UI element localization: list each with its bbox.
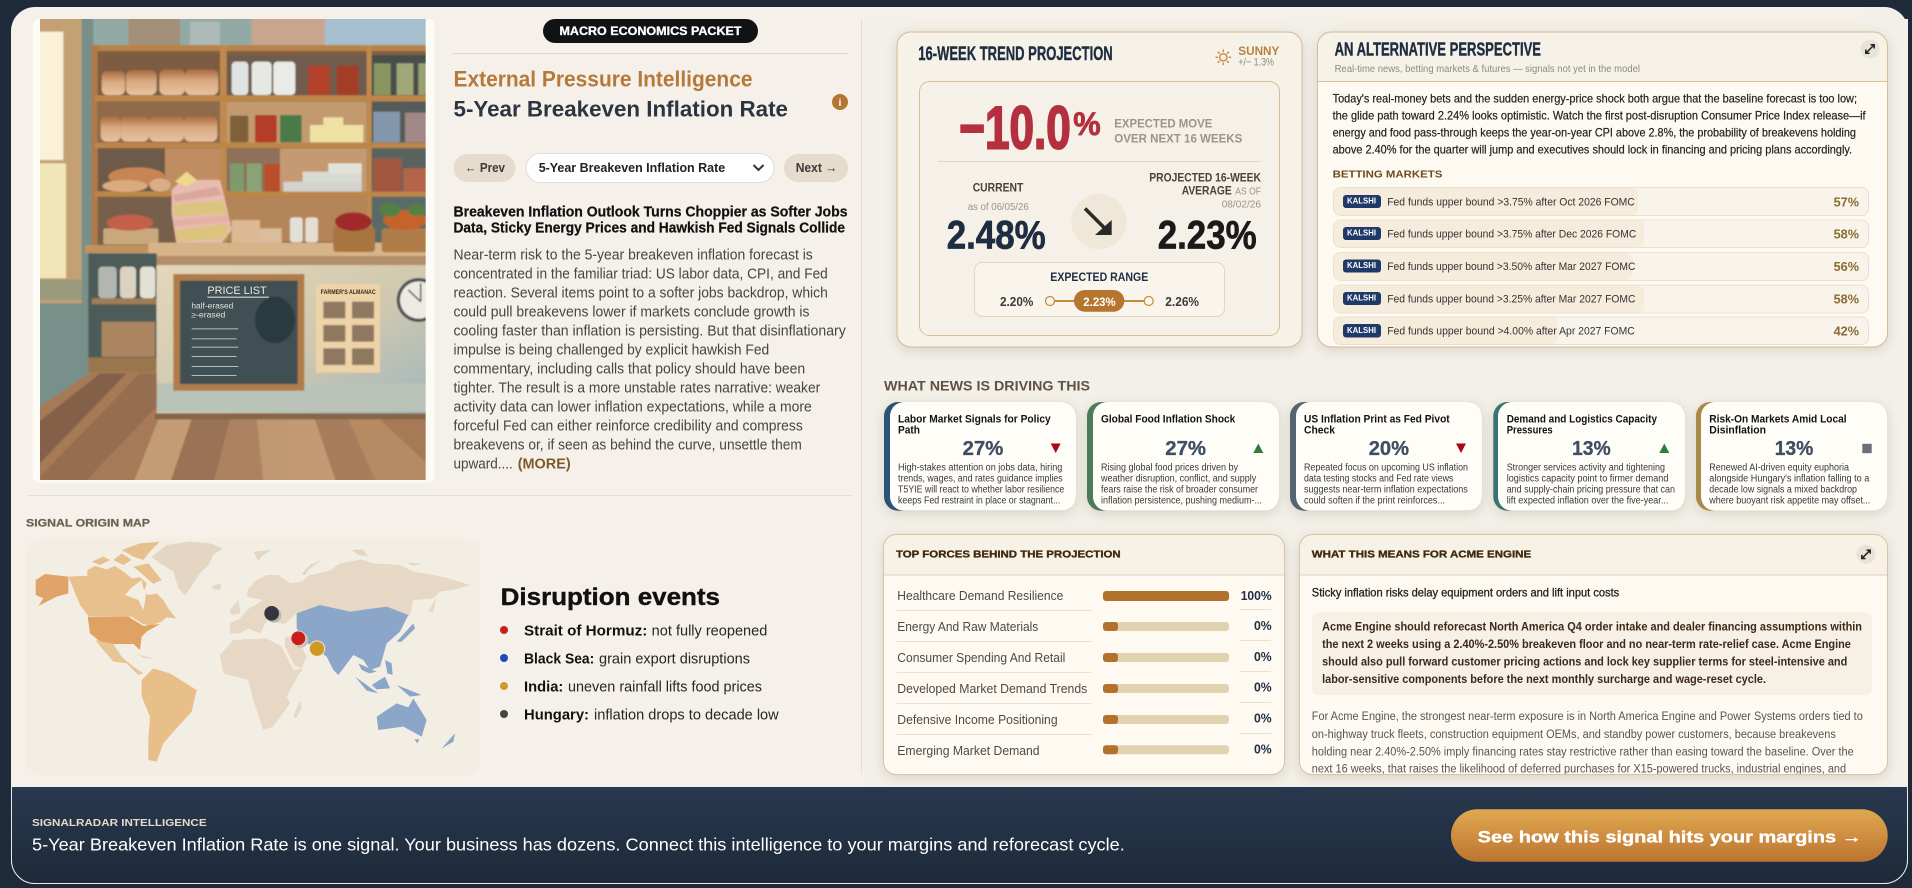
expected move caption: [1114, 116, 1242, 145]
floor: [37, 372, 430, 483]
event: Strait of Hormuz: not fully reopened: [652, 624, 767, 640]
summary text: concentrated in the familiar triad: US labor data, CPI, and Fed: [454, 266, 828, 282]
news card: risk-on markets: Disinflation: [1709, 424, 1766, 436]
panel: an alternative perspective: [1318, 32, 1888, 347]
betting market row 5: 42%: [1834, 324, 1859, 338]
vertical column divider: [861, 19, 862, 774]
weather label: +/− 1.3%: [1238, 57, 1274, 69]
current value: as of 06/05/26: [968, 201, 1029, 213]
news card: US inflation print: US Inflation Print as Fed Pivot: [1304, 413, 1450, 425]
news card: global food: weather disruption, conflict, and supply: [1100, 474, 1256, 485]
expected range: 2.26%: [1165, 295, 1199, 309]
headline: Breakeven Inflation Outlook Turns Choppier as Softer Jobs: [454, 204, 848, 220]
region: Alaska: [36, 574, 68, 606]
bread loaves: [102, 71, 125, 95]
force row: defensive income: [897, 712, 1272, 727]
event: India: uneven rainfall lifts food prices: [568, 680, 762, 696]
force row: defensive income: 0%: [1254, 712, 1272, 726]
expected move figure: %: [1073, 106, 1101, 142]
news card: demand and logistics: logistics capacity point to firmer demand: [1507, 474, 1668, 485]
footer eyebrow: SIGNALRADAR INTELLIGENCE: [32, 817, 207, 829]
betting market row 5: [1334, 317, 1868, 344]
forces title: TOP FORCES BEHIND THE PROJECTION: [896, 548, 1121, 560]
force row: healthcare: 100%: [1241, 589, 1272, 603]
summary text: impulse is being challenged by explicit hawkish Fed: [454, 342, 769, 358]
force row: energy: Energy And Raw Materials: [897, 619, 1039, 634]
event: Hungary: [500, 708, 779, 724]
page heading: External Pressure Intelligence: [454, 66, 752, 92]
betting market row 3: [1334, 252, 1868, 280]
force row: emerging markets: Emerging Market Demand: [897, 743, 1040, 758]
expected range: EXPECTED RANGE: [1050, 272, 1149, 284]
implication title: WHAT THIS MEANS FOR ACME ENGINE: [1312, 548, 1531, 560]
expected range: [974, 262, 1224, 316]
betting market row 2: 58%: [1834, 228, 1859, 242]
news card: risk-on markets: 13%: [1775, 438, 1814, 460]
projected value: PROJECTED 16-WEEK: [1149, 172, 1262, 184]
news card: labor market: Labor Market Signals for Policy: [898, 413, 1052, 425]
betting market row 5: KALSHI: [1347, 326, 1376, 335]
force row: developed markets: 0%: [1254, 681, 1272, 695]
news card: risk-on markets: [1696, 402, 1887, 511]
summary text: upward....: [454, 456, 513, 472]
region: United States: [88, 617, 160, 650]
betting market row 1: KALSHI: [1347, 197, 1376, 206]
implication details: holding near 2.40%-2.50% imply financing rates stay restrictive rather than easing toward the baseline. Over the: [1312, 747, 1854, 759]
footer banner: [12, 787, 1908, 884]
news card: global food: Global Food Inflation Shock: [1101, 413, 1236, 425]
chalkboard lettering: ≥-erased: [191, 310, 225, 319]
news card: demand and logistics: 13%: [1572, 438, 1611, 460]
chalkboard lettering: PRICE LIST: [207, 285, 267, 297]
news card: demand and logistics: [1493, 402, 1685, 511]
button: previous: ← Prev: [465, 160, 506, 175]
summary text: cooling faster than inflation is persisting. But that disinflationary: [454, 323, 847, 339]
betting market row 4: KALSHI: [1347, 294, 1376, 303]
arrow: downward trend: [1071, 194, 1127, 249]
projected value: AVERAGE: [1182, 185, 1232, 197]
betting market row 2: [1334, 220, 1868, 248]
news card: labor market: trends, wages, and rates guidance implies: [898, 474, 1063, 485]
stack of receipts: [172, 175, 232, 245]
footer message: 5-Year Breakeven Inflation Rate is one signal. Your business has dozens. Connect this intelligence to your margins and reforecast cycle.: [32, 834, 1125, 854]
alternative commentary: the glide path toward 2.24% looks optimistic. Watch the first post-disruption Consumer Price Index release—if: [1333, 109, 1866, 123]
force row: consumer: [897, 650, 1272, 665]
wall top: [92, 19, 252, 46]
summary text: forceful Fed can either reinforce credibility and compress: [454, 418, 803, 434]
alternative commentary: above 2.40% for the quarter will jump and executives should lock in financing and pricing plans accordingly.: [1333, 143, 1852, 157]
dropdown selector: 5-Year Breakeven Inflation Rate: [539, 161, 725, 175]
summary text: Near-term risk to the 5-year breakeven inflation forecast is: [454, 247, 813, 263]
summary text: breakevens or, if seen as behind the curve, unsettle them: [454, 437, 802, 453]
button: next: Next →: [796, 160, 837, 175]
projected value: 2.23%: [1158, 213, 1257, 257]
news card: global food: 27%: [1165, 438, 1206, 460]
news card: labor market: [884, 402, 1076, 511]
event: Hungary: inflation drops to decade low: [594, 708, 779, 724]
inner panel: [920, 82, 1280, 336]
betting market row 4: 58%: [1834, 292, 1859, 306]
news card: US inflation print: data testing stocks and Fed rate views: [1304, 474, 1453, 485]
panel: 16-week trend projection: [897, 32, 1302, 347]
news card: labor market: Path: [898, 424, 920, 436]
button: next: [784, 154, 848, 182]
expected range: 2.23%: [1083, 297, 1116, 309]
force row: developed markets: Developed Market Demand Trends: [897, 681, 1088, 696]
betting market row 3: 56%: [1834, 260, 1859, 274]
betting market row 2: KALSHI: [1347, 229, 1376, 238]
chalkboard lettering: [191, 285, 376, 376]
weather label: [1238, 44, 1279, 69]
weather label: SUNNY: [1238, 44, 1279, 58]
force row: energy: [897, 619, 1272, 634]
icon: sun: [1216, 50, 1231, 65]
headline: Data, Sticky Energy Prices and Hawkish Fed Signals Collide: [454, 220, 845, 236]
news card: demand and logistics: Pressures: [1507, 424, 1553, 436]
alternative title: AN ALTERNATIVE PERSPECTIVE: [1335, 39, 1541, 60]
betting market row 5: Fed funds upper bound >4.00% after Apr 2027 FOMC: [1387, 326, 1635, 338]
news card: risk-on markets: decade low signals a mixed backdrop: [1709, 485, 1857, 496]
alternative commentary: Today's real-money bets and the sudden energy-price shock both argue that the baseline forecast is too low;: [1333, 92, 1857, 106]
bottles and cans: [232, 62, 248, 95]
event: Strait of Hormuz: [500, 624, 767, 640]
page heading: [454, 66, 788, 122]
region: Asia Pacific: [297, 605, 455, 748]
region: Canada: [68, 542, 176, 626]
recommendation callout: Acme Engine should reforecast North America Q4 order intake and dealer financing assumptions within: [1322, 620, 1862, 634]
betting market row 2: Fed funds upper bound >3.75% after Dec 2026 FOMC: [1387, 228, 1636, 240]
region: South America: [142, 668, 197, 762]
recommendation callout: should also pull forward customer pricing actions and lock key supplier terms for steel-intensive and: [1322, 654, 1847, 668]
news card: labor market: High-stakes attention on jobs data, hiring: [898, 463, 1062, 474]
baskets of produce: [333, 227, 375, 252]
event: Black Sea: Black Sea:: [524, 652, 594, 668]
projected value: AS OF: [1235, 185, 1261, 197]
left wall and window: [37, 17, 93, 407]
recommendation callout: the next 2 weeks using a 2.40%-2.50% breakeven floor and no near-term rate-relief case. Acme Engine: [1322, 637, 1851, 651]
summary text: commentary, including calls that policy should have been: [454, 361, 805, 377]
news card: global food: Rising global food prices driven by: [1101, 463, 1238, 474]
disruption events list: [500, 624, 779, 724]
call-to-action button: See how this signal hits your margins →: [1478, 828, 1862, 847]
panel: what this means for Acme Engine: [1300, 534, 1888, 776]
icon: expand: [1856, 545, 1876, 564]
expected move figure: −10.0: [959, 94, 1071, 161]
news card: US inflation print: 20%: [1369, 438, 1409, 460]
event: Strait of Hormuz: Strait of Hormuz:: [524, 624, 647, 640]
lower left shelves: [88, 253, 157, 370]
packet badge: MACRO ECONOMICS PACKET: [560, 26, 742, 38]
implication details: [1312, 711, 1863, 776]
summary text: activity data can lower inflation expectations, while a more: [454, 399, 812, 415]
chalkboard frame: [173, 274, 304, 391]
news card: risk-on markets: Risk-On Markets Amid Local: [1709, 413, 1847, 425]
news card: US inflation print: Check: [1304, 424, 1336, 436]
illustration: watercolor grocery store shelves: [33, 17, 441, 483]
betting market row 1: 57%: [1834, 196, 1859, 210]
news card: labor market: 27%: [963, 438, 1004, 460]
news card: demand and logistics: and supply-chain pricing pressure that can: [1507, 485, 1675, 496]
betting market row 3: Fed funds upper bound >3.50% after Mar 2027 FOMC: [1387, 261, 1636, 273]
chalkboard lettering: half-erased: [191, 301, 233, 310]
news card: US inflation print: could soften if the print reinforces...: [1304, 496, 1445, 507]
news card: US inflation print: suggests near-term inflation expectations: [1304, 485, 1468, 496]
almanac poster: [316, 284, 380, 373]
icon: info: i: [839, 97, 842, 109]
right column packages: [374, 63, 391, 95]
news card: global food: [1087, 402, 1279, 511]
disruption events heading: Disruption events: [501, 584, 720, 611]
implication details: on-highway truck fleets, construction equipment OEMs, and standby power customers, because breakevens: [1312, 729, 1836, 741]
button: previous: [454, 154, 516, 182]
news card: US inflation print: Repeated focus on upcoming US inflation: [1304, 463, 1468, 474]
force row: consumer: Consumer Spending And Retail: [897, 650, 1065, 665]
icon: expand: [1860, 40, 1880, 58]
expected move caption: OVER NEXT 16 WEEKS: [1114, 131, 1242, 145]
news card: risk-on markets: alongside Hungary's inflation falling to a: [1709, 474, 1870, 485]
news card: US inflation print: [1290, 402, 1482, 511]
force row: energy: 0%: [1254, 619, 1272, 633]
trend title: 16-WEEK TREND PROJECTION: [918, 43, 1113, 65]
betting market row 4: Fed funds upper bound >3.25% after Mar 2027 FOMC: [1387, 294, 1636, 306]
headline: [454, 204, 848, 236]
projected value: 08/02/26: [1222, 198, 1261, 210]
betting market row 3: KALSHI: [1347, 261, 1376, 270]
force row: healthcare: Healthcare Demand Resilience: [897, 588, 1063, 603]
betting market row 4: [1334, 285, 1868, 313]
wall clock: [396, 277, 426, 323]
summary text: tighter. The result is a more unstable rates narrative: weaker: [454, 380, 820, 396]
event: Hungary: Hungary:: [524, 708, 589, 724]
projected value: [1149, 172, 1262, 257]
betting markets heading: BETTING MARKETS: [1333, 169, 1442, 181]
icon: info: [832, 94, 848, 110]
betting market row 1: Fed funds upper bound >3.75% after Oct 2026 FOMC: [1387, 196, 1635, 208]
panel: top forces behind the projection: [884, 534, 1284, 774]
force row: defensive income: Defensive Income Positioning: [897, 712, 1058, 727]
expected move caption: EXPECTED MOVE: [1114, 116, 1212, 130]
summary text: could pull breakevens lower if markets conclude growth is: [454, 304, 810, 320]
implication details: For Acme Engine, the strongest near-term exposure is in North America Engine and Power Systems orders tied to: [1312, 711, 1863, 723]
world map: [26, 538, 480, 775]
news card: labor market: keeps Fed restraint in place or stagnant...: [898, 496, 1060, 507]
force row: developed markets: [897, 681, 1272, 696]
chalkboard lettering: FARMER'S ALMANAC: [321, 289, 376, 296]
news card: demand and logistics: lift expected inflation over the five-year...: [1507, 496, 1668, 507]
force row: consumer: 0%: [1254, 650, 1272, 664]
alternative commentary: [1333, 92, 1866, 157]
recommendation callout: [1312, 612, 1872, 695]
lower shelf goods: [103, 228, 158, 244]
alternative subtitle: Real-time news, betting markets & futures — signals not yet in the model: [1335, 63, 1640, 75]
expected range: 2.20%: [1000, 295, 1033, 309]
news card: global food: inflation persistence, pushing medium-...: [1101, 496, 1262, 507]
recommendation callout: labor-sensitive components before the next monthly surcharge and wage-reset cycle.: [1322, 672, 1766, 686]
shelving unit: [92, 45, 430, 245]
counter front: [157, 265, 430, 415]
event: Black Sea: grain export disruptions: [599, 652, 750, 668]
news card: demand and logistics: Demand and Logistics Capacity: [1507, 413, 1658, 425]
implication details: next 16 weeks, that raises the likelihood of deferred purchases for X15-powered trucks, industrial engines, and: [1312, 764, 1846, 776]
news card: demand and logistics: Stronger services activity and tightening: [1507, 463, 1665, 474]
current value: 2.48%: [947, 213, 1046, 257]
event: India: India:: [524, 680, 563, 696]
region: Mexico and Central America: [95, 640, 143, 675]
markers: disruption locations: [264, 606, 325, 656]
summary text: [454, 247, 847, 472]
summary text: (MORE): [518, 456, 571, 472]
betting market row 1: [1334, 188, 1868, 216]
summary text: reaction. Several items point to a softer jobs backdrop, which: [454, 285, 828, 301]
map heading: SIGNAL ORIGIN MAP: [26, 518, 150, 530]
call-to-action button: [1451, 809, 1888, 862]
force row: emerging markets: 0%: [1254, 743, 1272, 757]
region: Greenland and Arctic: [152, 542, 422, 596]
page heading: 5-Year Breakeven Inflation Rate: [454, 96, 788, 122]
region: Caribbean: [137, 654, 157, 659]
current value: [947, 182, 1046, 257]
news card: risk-on markets: Renewed AI-driven equity euphoria: [1709, 463, 1849, 474]
force row: emerging markets: [897, 743, 1272, 758]
current value: CURRENT: [973, 182, 1023, 194]
implication headline: Sticky inflation risks delay equipment orders and lift input costs: [1312, 586, 1619, 600]
horizontal divider under illustration: [27, 495, 853, 496]
event: Black Sea: [500, 652, 750, 668]
region: Africa and Arabia: [220, 637, 307, 730]
force row: healthcare: [897, 588, 1272, 603]
dropdown selector: [526, 154, 774, 182]
counter: [85, 245, 157, 253]
news card: global food: fears raise the risk of broader consumer: [1101, 485, 1259, 496]
region: Europe and Russia: [230, 559, 470, 633]
news card: labor market: T5YIE will react to whether labor resilience: [898, 485, 1065, 496]
packet badge: [543, 19, 758, 43]
news card: risk-on markets: where buoyant risk appetite may offset...: [1708, 496, 1870, 507]
news section heading: WHAT NEWS IS DRIVING THIS: [884, 379, 1090, 394]
alternative commentary: energy and food pass-through keeps the year-on-year CPI above 2.8%, the probability of breakevens holding: [1333, 126, 1856, 140]
